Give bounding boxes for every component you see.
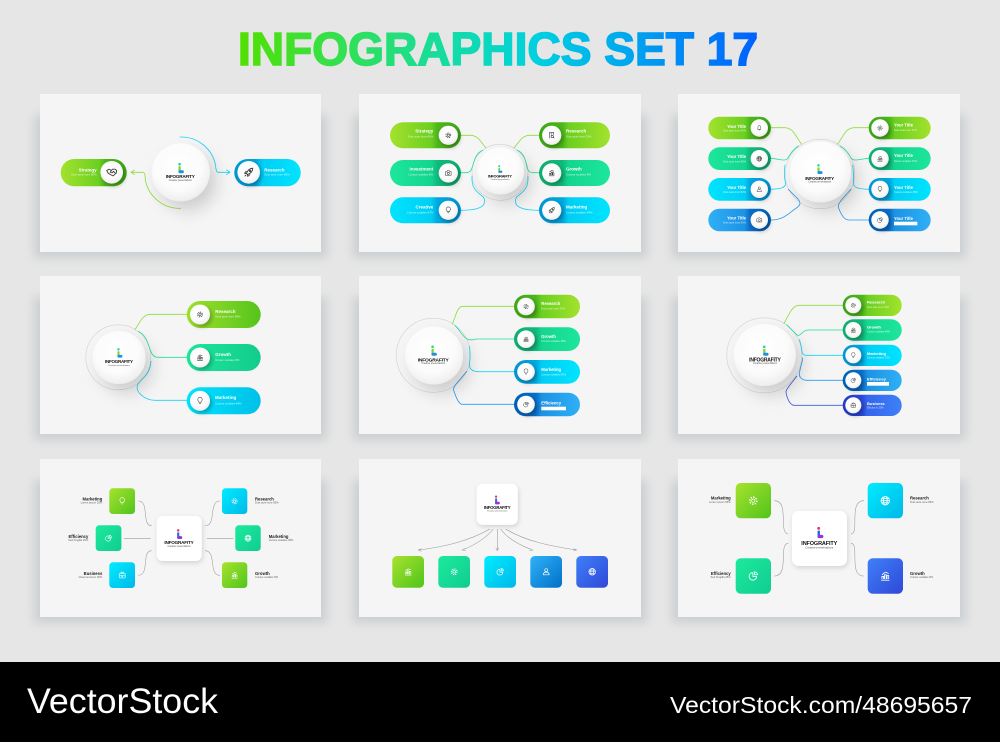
tile: globe <box>576 556 608 588</box>
central circle <box>152 143 210 201</box>
item: Marketing: Lorem ipsum 55% <box>709 500 731 504</box>
pill: Research: Research <box>566 128 587 134</box>
item: Business <box>78 562 135 588</box>
item: Efficiency: Efficiency <box>69 534 89 539</box>
pill: Research <box>843 295 902 316</box>
central circle: INFOGRAFITY <box>805 176 834 181</box>
pill: Business <box>843 395 902 416</box>
pill: left 4: Duis aute irure 50% <box>723 220 747 224</box>
pill: Research <box>514 295 580 318</box>
pill: Creative: Cursus sodales 67% <box>407 210 434 214</box>
central square: INFOGRAFITY <box>484 505 511 510</box>
pill: Growth <box>539 160 610 186</box>
pill: right 3 <box>869 178 931 201</box>
pill: left 2: Duis aute irure 85% <box>723 159 747 163</box>
pill: Business: Efficitur in 25% <box>867 407 884 410</box>
item: Marketing <box>235 525 294 551</box>
pill: left 3: Duis aute irure 52% <box>723 190 747 194</box>
pill: Marketing <box>514 360 580 384</box>
panel: 3 options right <box>34 276 327 440</box>
item: Marketing <box>81 488 135 514</box>
pill: left 3 <box>708 178 771 201</box>
pill: Strategy <box>61 159 127 186</box>
central square: Creative presentations <box>805 545 834 549</box>
pill: left 4 <box>708 209 771 231</box>
pill: Marketing <box>539 197 610 223</box>
central square: Creative presentations <box>487 510 508 513</box>
pill: left 1 <box>708 117 771 139</box>
central circle <box>477 148 524 194</box>
footer band <box>0 662 1000 742</box>
central circle <box>790 142 851 202</box>
central circle: INFOGRAFITY <box>166 174 195 179</box>
connectors <box>727 305 843 405</box>
pill: Efficiency: Efficiency <box>867 377 887 382</box>
central circle: INFOGRAFITY <box>105 359 133 364</box>
item: Growth: Cursus sodales 8% <box>910 575 934 579</box>
tile: pie <box>484 556 516 588</box>
pill: Creative <box>390 197 461 223</box>
pill: right 1: Duis aute irure 33% <box>894 128 917 132</box>
pill: Efficiency: Efficiency <box>541 401 562 406</box>
connectors <box>771 128 869 220</box>
connectors <box>396 306 514 404</box>
item: Research <box>222 488 279 514</box>
pill: Efficiency <box>843 370 902 391</box>
pill: right 3: Cursus sodales 48% <box>894 190 918 194</box>
central square <box>477 484 518 525</box>
item: Business: Business <box>84 571 103 576</box>
pill: Growth: Donec sodales 8% <box>215 358 240 362</box>
connectors <box>774 501 864 576</box>
pill: Investment: Cursus sodales 8% <box>408 172 434 176</box>
panel: top-down tree <box>353 459 647 623</box>
connectors <box>131 137 230 208</box>
item: Marketing: Marketing <box>269 534 289 539</box>
pill: Marketing <box>187 387 261 414</box>
central circle: INFOGRAFITY <box>749 357 782 363</box>
central circle: Creative presentations <box>753 362 778 365</box>
item: Growth: Growth <box>910 571 925 576</box>
pill: left 1: Duis aute irure 85% <box>723 129 747 133</box>
item: Growth: Cursus sodales 8% <box>255 575 279 579</box>
pill: Growth <box>843 319 902 341</box>
pill: left 2 <box>708 147 771 170</box>
item: Research: Duis aute irure 85% <box>910 500 934 504</box>
central square: Creative presentations <box>168 545 191 548</box>
item: Marketing: Marketing <box>711 496 731 500</box>
pill: Strategy: Duis aute irure 85% <box>408 135 434 139</box>
pill: Business: Business <box>867 401 886 406</box>
title: INFOGRAPHICS SET 17 <box>238 23 758 75</box>
central circle <box>405 326 463 384</box>
pill: Marketing: Marketing <box>215 395 237 400</box>
central circle <box>92 331 146 384</box>
pill: left 1: Your Title <box>727 124 747 129</box>
item: Marketing: Marketing <box>83 496 103 502</box>
tile: person <box>530 556 562 588</box>
connectors <box>86 314 187 400</box>
item: Efficiency: Sed fringilla 45% <box>68 538 89 542</box>
central square <box>792 511 847 566</box>
pill: Marketing: Cursus sodales 50% <box>541 372 567 376</box>
item: Growth <box>868 558 934 594</box>
pill: Strategy: Strategy <box>79 167 97 172</box>
pill: right 2 <box>869 147 931 170</box>
panel: 8 options <box>672 94 966 258</box>
item: Research: Research <box>255 496 274 502</box>
panel: 2 options <box>34 94 327 258</box>
pill: Research: Duis aute irure 85% <box>215 314 241 318</box>
pill: Marketing: Cursus sodales 48% <box>215 401 242 405</box>
pill: Growth: Growth <box>867 325 882 330</box>
central square: INFOGRAFITY <box>801 541 838 547</box>
pill: Research: Research <box>215 309 236 314</box>
central square <box>157 516 202 561</box>
pill: right 2: Donec sodales 15% <box>894 159 918 163</box>
item: Research: Research <box>910 496 929 500</box>
item: Marketing: Cursus sodales 48% <box>269 538 294 542</box>
pill: Research: Research <box>264 167 285 172</box>
pill: Strategy: Duis aute irure 85% <box>71 172 97 176</box>
pill: Growth: Cursus sodales 8% <box>566 172 591 176</box>
pill: Marketing: Marketing <box>541 367 562 372</box>
pill: right 4 <box>869 209 931 231</box>
pill: Research: Research <box>541 301 561 306</box>
pill: left 3: Your Title <box>727 185 747 190</box>
item: Growth <box>222 562 279 588</box>
pill: Research <box>234 159 301 186</box>
tile: gear <box>438 556 470 588</box>
pill: Growth: Growth <box>215 352 231 357</box>
pill: Research: Duis aute irure 33% <box>566 135 592 139</box>
pill: Research: Duis aute irure 33% <box>867 306 890 309</box>
item: Efficiency <box>711 558 771 594</box>
pill: Growth <box>514 327 580 351</box>
central circle: Creative presentations <box>491 178 510 181</box>
pill: Growth: Growth <box>541 334 556 339</box>
pill: right 3: Your Title <box>894 185 914 190</box>
pill: Marketing: Cursus sodales 48% <box>566 210 593 214</box>
central circle: INFOGRAFITY <box>488 173 512 178</box>
pill: right 1: Your Title <box>894 123 914 128</box>
panel: 4 options right <box>353 276 647 440</box>
pill: right 4: Your Title <box>894 216 914 221</box>
pill: Research: Duis aute irure 33% <box>541 306 566 310</box>
pill: Marketing: Cursus sodales 25% <box>867 357 891 360</box>
pill: Investment <box>390 160 461 186</box>
panel: 6 squares <box>34 459 327 623</box>
central circle: INFOGRAFITY <box>418 357 450 363</box>
central circle <box>734 324 796 386</box>
panel: 5 options right <box>672 276 966 440</box>
central circle: Creative presentations <box>421 362 446 365</box>
pill: Strategy <box>390 122 461 148</box>
central circle: Creative presentations <box>169 179 193 182</box>
item: Efficiency: Sed fringilla 45% <box>711 575 731 579</box>
pill: left 2: Your Title <box>727 154 747 159</box>
tile: chart <box>392 556 424 588</box>
pill: Strategy: Strategy <box>415 128 434 134</box>
panel: 4 squares <box>672 459 966 623</box>
pill: Research: Research <box>867 300 886 305</box>
arrows <box>418 529 577 551</box>
item: Research: Duis aute irure 85% <box>255 501 279 505</box>
item: Marketing <box>709 483 771 518</box>
item: Marketing: Lorem ipsum 55% <box>81 501 103 505</box>
pill: Marketing <box>843 345 902 366</box>
pill: Growth: Growth <box>566 166 582 171</box>
pill: Research: Duis aute irure 85% <box>264 172 290 176</box>
item: Research <box>868 483 934 518</box>
connectors <box>461 135 539 210</box>
pill: Creative: Creative <box>416 204 434 209</box>
item: Efficiency <box>68 525 121 551</box>
pill: Research <box>187 301 261 328</box>
pill: Marketing: Marketing <box>867 351 886 356</box>
central circle: Creative presentations <box>808 180 832 184</box>
pill: Growth: Cursus sodales 48% <box>541 339 567 343</box>
pill: Efficiency <box>514 393 580 416</box>
footer id: VectorStock.com/48695657 <box>670 692 972 718</box>
pill: Research <box>539 122 610 148</box>
item: Efficiency: Efficiency <box>711 571 731 576</box>
pill: Growth: Cursus sodales 48% <box>867 331 891 334</box>
central circle: Creative presentations <box>108 364 131 367</box>
pill: Growth <box>187 344 261 371</box>
connectors <box>124 501 233 575</box>
item: Growth: Growth <box>255 571 270 576</box>
pill: Investment: Investment <box>410 166 434 171</box>
pill: left 4: Your Title <box>727 216 747 220</box>
panel: 6 options <box>353 94 647 258</box>
pill: Marketing: Marketing <box>566 204 588 209</box>
footer logo: VectorStock <box>27 682 219 721</box>
pill: right 2: Your Title <box>894 153 914 158</box>
item: Business: Vivamus lorem 25% <box>78 575 103 579</box>
central square: INFOGRAFITY <box>164 540 194 545</box>
pill: right 1 <box>869 117 931 139</box>
